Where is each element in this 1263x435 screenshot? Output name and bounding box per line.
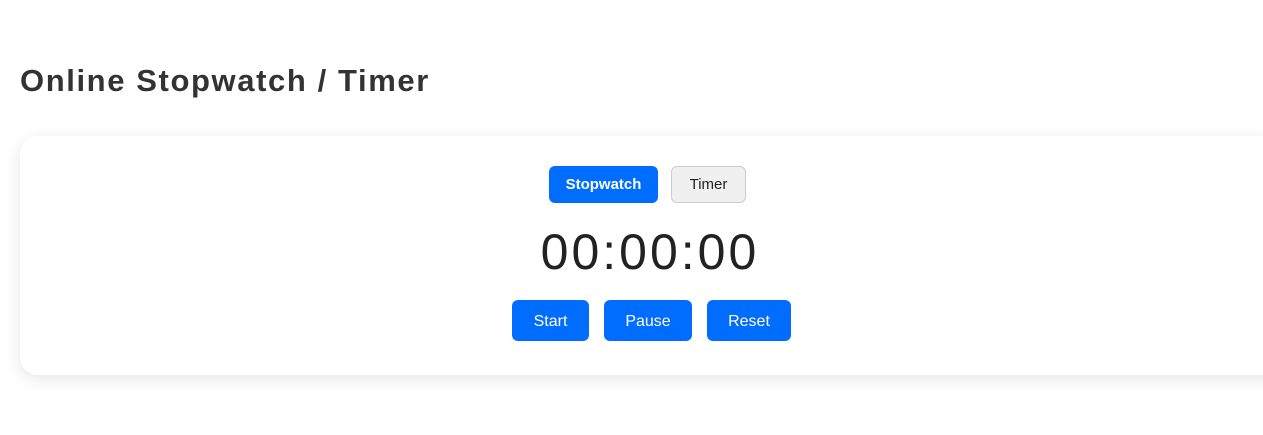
button: reset: [707, 300, 791, 341]
button: start: Start: [534, 313, 567, 330]
button: pause: [604, 300, 692, 341]
button: reset: Reset: [728, 313, 770, 330]
tab: timer: Timer: [690, 176, 727, 193]
tab: stopwatch: [549, 166, 658, 203]
button: start: [512, 300, 589, 341]
button: pause: Pause: [625, 313, 671, 330]
tab: stopwatch: Stopwatch: [566, 176, 641, 193]
time display: 00:00:00: [541, 224, 759, 280]
tab: timer: [671, 166, 746, 203]
panel: stopwatch card: [20, 136, 1263, 375]
title: Online Stopwatch / Timer: [20, 63, 430, 98]
